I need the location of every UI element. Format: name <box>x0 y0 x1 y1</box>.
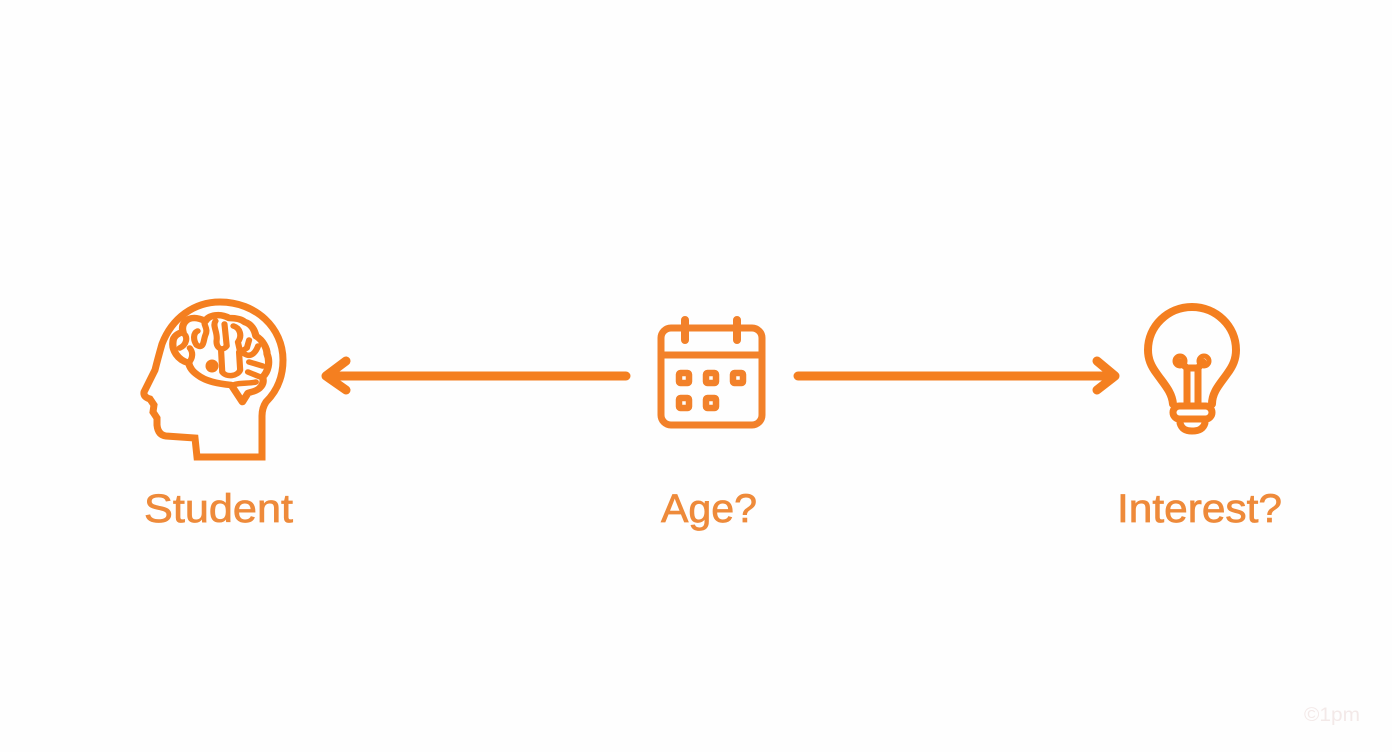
arrow: pointing left to student <box>326 361 626 390</box>
icon: calendar <box>661 320 762 425</box>
brain outline <box>173 315 269 402</box>
calendar body <box>661 328 762 425</box>
brain <box>173 315 269 402</box>
head outline <box>144 302 283 457</box>
bulb glass <box>1148 307 1236 404</box>
label: Age?: Age? <box>661 487 757 531</box>
brain node <box>206 360 218 372</box>
icon: light bulb <box>1148 307 1236 431</box>
bulb bottom cap <box>1180 423 1205 431</box>
calendar rings <box>685 320 737 340</box>
filament <box>1180 362 1203 403</box>
icon: head with brain <box>144 302 283 457</box>
label: Student: Student <box>144 487 293 531</box>
label: Interest?: Interest? <box>1117 487 1282 531</box>
calendar header line <box>661 352 762 358</box>
arrow: pointing right to interest <box>798 361 1115 390</box>
watermark: ©1pm <box>1304 705 1360 726</box>
calendar date squares <box>679 373 743 408</box>
brain folds <box>180 321 263 385</box>
bulb base <box>1173 406 1212 419</box>
filament tips <box>1175 356 1185 366</box>
